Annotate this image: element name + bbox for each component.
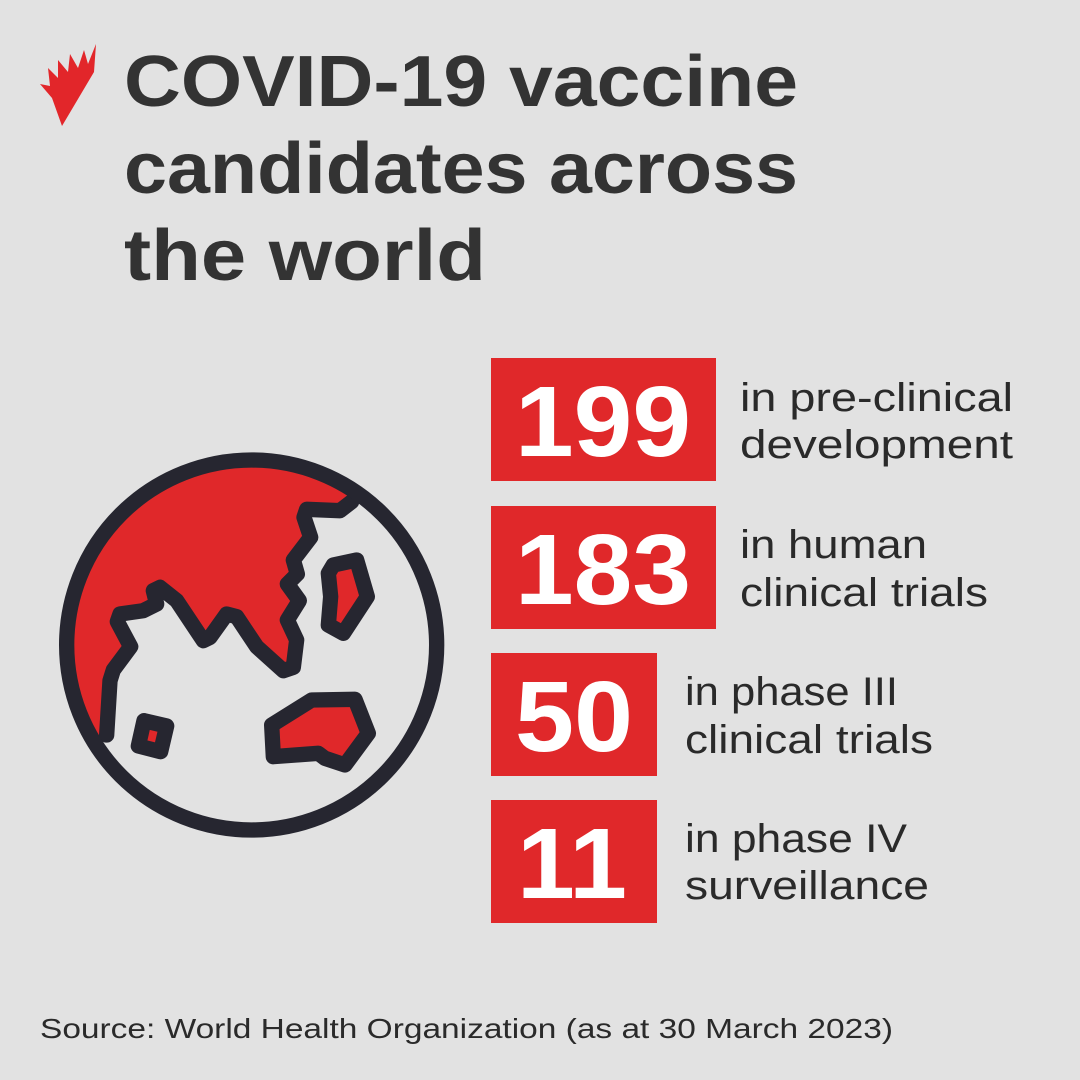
stat: 11: in phase IV xyxy=(685,817,907,861)
stat: 183: 183 xyxy=(515,514,691,626)
stat: 199: development xyxy=(740,423,1013,467)
stat: 50 xyxy=(491,653,933,776)
title: COVID-19 vaccine xyxy=(124,42,798,122)
source: Source: World Health Organization (as at 30 March 2023) xyxy=(40,1013,893,1044)
stat: 199 xyxy=(491,358,1013,481)
stat: 183: clinical trials xyxy=(740,571,988,615)
stat: 183: in human xyxy=(740,523,927,567)
stat: 199: in pre-clinical xyxy=(740,376,1013,420)
title: candidates across xyxy=(124,129,798,209)
stat: 50: in phase III xyxy=(685,670,898,714)
stat: 11: surveillance xyxy=(685,864,929,908)
logo xyxy=(40,44,96,126)
stat: 199: 199 xyxy=(515,366,691,478)
title xyxy=(124,42,798,296)
stat: 11: 11 xyxy=(517,808,627,920)
stat: 183 xyxy=(491,506,988,629)
stat: 11 xyxy=(491,800,929,923)
stat: 50: clinical trials xyxy=(685,718,933,762)
stat: 50: 50 xyxy=(515,661,633,773)
icon: globe xyxy=(50,440,437,830)
title: the world xyxy=(124,216,486,296)
